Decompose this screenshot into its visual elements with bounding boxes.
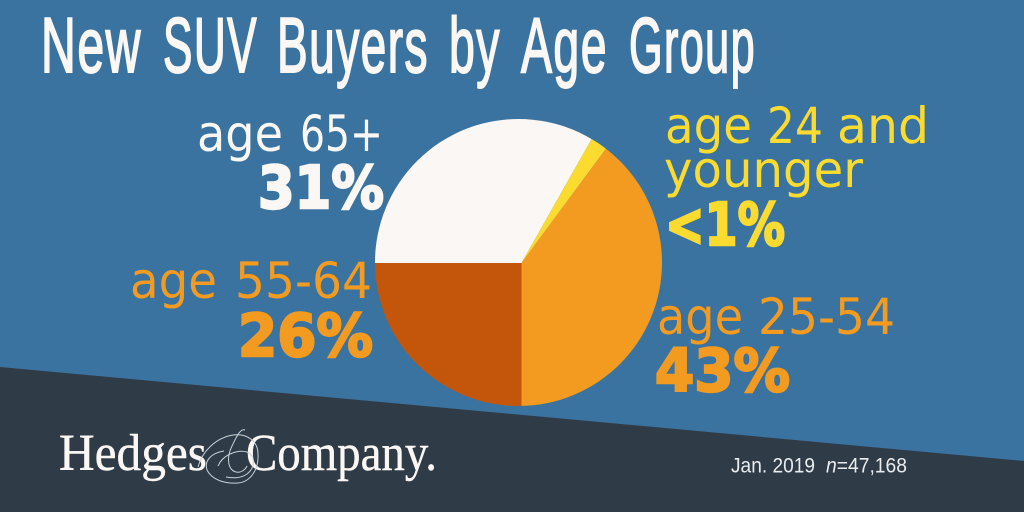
source note: n=47,168 [826, 454, 907, 478]
label: age 55-64: 26% [238, 301, 373, 370]
logo: Hedges & Company: Hedges [59, 425, 207, 482]
title [41, 1, 756, 89]
label: age 65+ [197, 105, 384, 222]
label: age 24 and younger: and [837, 97, 929, 155]
label: age 25-54: age [657, 288, 743, 346]
logo: Hedges & Company [59, 425, 437, 483]
logo ampersand flourish [198, 430, 258, 483]
slice: age 24 and younger [522, 139, 606, 262]
title: SUV [163, 1, 258, 89]
label: age 24 and younger [664, 97, 929, 259]
dark footer band [0, 367, 1024, 512]
label: age 25-54: 25-54 [758, 288, 895, 346]
label: age 65+: 65+ [300, 105, 383, 163]
title: New [41, 1, 142, 89]
label: age 24 and younger: age [665, 97, 752, 155]
logo: Hedges & Company: Company. [246, 425, 437, 482]
slice: age 55-64 [375, 263, 522, 406]
label: age 24 and younger: younger [664, 141, 864, 199]
label: age 24 and younger: 24 [767, 97, 823, 155]
pie chart [375, 119, 662, 406]
label: age 24 and younger: <1% [665, 190, 785, 259]
label: age 55-64: age [130, 252, 217, 310]
label: age 65+: 31% [258, 153, 384, 222]
title: by [449, 1, 501, 89]
source note: Jan. 2019 [731, 454, 815, 478]
label: age 25-54 [655, 288, 895, 405]
label: age 25-54: 43% [655, 336, 790, 405]
title: Age [521, 1, 608, 89]
title: Buyers [277, 1, 429, 89]
label: age 55-64: 55-64 [235, 252, 372, 310]
slice: age 65+ [375, 119, 592, 263]
source note [731, 454, 907, 478]
label: age 55-64 [130, 252, 373, 370]
label: age 65+: age [197, 105, 283, 163]
title: Group [629, 1, 756, 89]
slice: age 25-54 [522, 148, 662, 406]
